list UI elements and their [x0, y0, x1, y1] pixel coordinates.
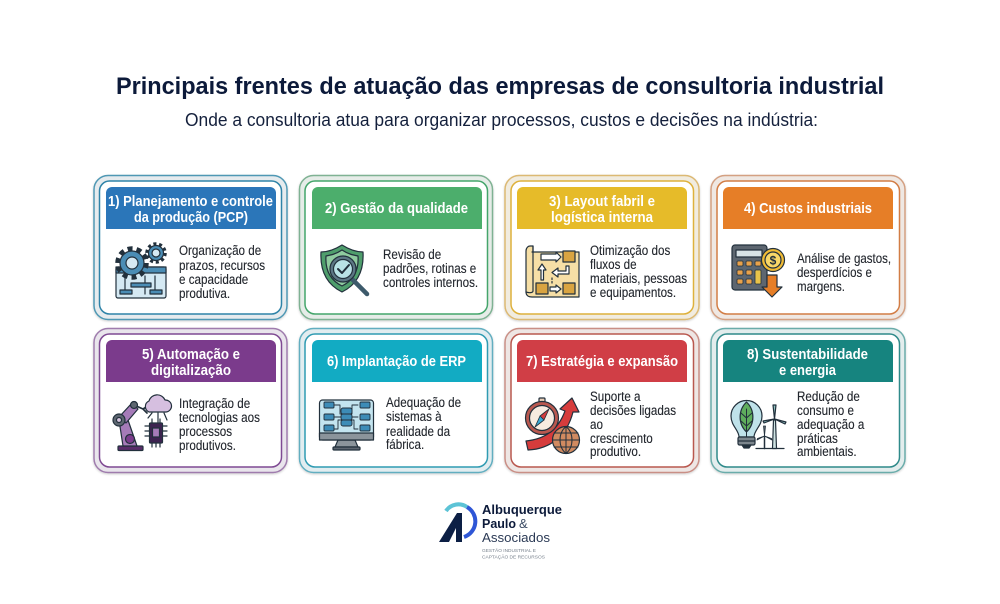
header: 1	[106, 187, 276, 229]
text: 2: padrões, rotinas e	[383, 261, 476, 276]
logo wordmark	[482, 503, 562, 560]
header: 8	[723, 340, 893, 382]
text: 5: Integração de	[179, 396, 250, 411]
text: 4: margens.	[797, 279, 845, 294]
text: 7: Suporte a	[590, 389, 641, 404]
text: 1: e capacidade	[179, 272, 248, 287]
text: 1: prazos, recursos	[179, 258, 265, 273]
text: 7: ao	[590, 417, 603, 432]
logo: Albuquerque Paulo & Associados	[439, 503, 562, 560]
panel: 3 layout fabril e logística interna	[505, 176, 699, 320]
text: 1	[179, 243, 265, 301]
text: 3: Otimização dos	[590, 243, 670, 258]
text: 6: Adequação de	[386, 395, 461, 410]
header: 6	[312, 340, 482, 382]
panel: 7 estratégia e expansão	[505, 328, 699, 472]
header: 1: da produção (PCP)	[134, 209, 248, 226]
header: 8: 8) Sustentabilidade	[747, 346, 868, 363]
header: 2: 2) Gestão da qualidade	[325, 200, 468, 217]
header: 5: digitalização	[151, 362, 231, 379]
text: 5: tecnologias aos	[179, 410, 260, 425]
header: 1: 1) Planejamento e controle	[108, 193, 273, 210]
panel: 1 planejamento e controle da produção	[94, 176, 287, 320]
panel: 2 gestão da qualidade	[300, 176, 492, 320]
header: 3	[517, 187, 687, 229]
icon: calculator, coin and down arrow: $	[770, 254, 777, 268]
text: 7	[590, 389, 676, 459]
text: 7: decisões ligadas	[590, 403, 676, 418]
icon: calculator, coin and down arrow	[732, 245, 784, 297]
panel: 5 automação e digitalização	[94, 328, 287, 472]
header: 2	[312, 187, 482, 229]
header: 5: 5) Automação e	[142, 346, 240, 363]
panel: 8 sustentabilidade e energia	[711, 328, 905, 472]
header: 7	[517, 340, 687, 382]
title: Principais frentes de atuação das empresas de consultoria industrial	[116, 73, 884, 100]
header: 3: 3) Layout fabril e	[549, 193, 655, 210]
text: 6: realidade da	[386, 424, 450, 439]
icon: light bulb with leaf and wind turbines	[731, 400, 786, 448]
icon: gears and control window	[116, 244, 166, 298]
text: 8: práticas	[797, 431, 838, 446]
text: 2: controles internos.	[383, 275, 478, 290]
header: 7: 7) Estratégia e expansão	[526, 353, 678, 370]
text: 3	[590, 243, 687, 300]
header: 4	[723, 187, 893, 229]
logo wordmark: Albuquerque	[482, 503, 562, 517]
text: 2: Revisão de	[383, 247, 441, 262]
icon: compass, growth arrow and globe	[526, 398, 580, 454]
text: 3: materiais, pessoas	[590, 271, 687, 286]
header: 6: 6) Implantação de ERP	[327, 353, 466, 370]
text: 8: Redução de	[797, 389, 860, 404]
icon: factory floor plan	[526, 246, 579, 297]
logo wordmark: Paulo	[482, 516, 516, 531]
header: 3: logística interna	[551, 209, 654, 226]
text: 6	[386, 395, 461, 452]
text: 8	[797, 389, 864, 459]
text: 8: adequação a	[797, 417, 864, 432]
text: 1: produtiva.	[179, 286, 230, 301]
logo wordmark: &	[519, 516, 528, 531]
text: 1: Organização de	[179, 243, 261, 258]
panel: 6 implantação de ERP	[300, 328, 492, 472]
header: 5	[106, 340, 276, 382]
icon: shield with magnifier	[321, 245, 367, 294]
text: 2	[383, 247, 478, 290]
text: 5: produtivos.	[179, 438, 236, 453]
logo wordmark: GESTÃO INDUSTRIAL E	[482, 547, 536, 554]
icon: logo mark	[439, 504, 475, 542]
text: 8: consumo e	[797, 403, 854, 418]
header: 8: e energia	[779, 362, 837, 379]
panel: 4 custos industriais	[711, 176, 905, 320]
text: 6: sistemas à	[386, 409, 442, 424]
text: 4: Análise de gastos,	[797, 251, 891, 266]
subtitle: Onde a consultoria atua para organizar processos, custos e decisões na indústria:	[185, 110, 818, 130]
icon: robot arm, cloud and chip	[113, 395, 172, 450]
text: 6: fábrica.	[386, 437, 424, 452]
icon: monitor with ERP modules	[320, 400, 374, 450]
text: 5: processos	[179, 424, 232, 439]
header: 4: 4) Custos industriais	[744, 200, 872, 217]
logo wordmark: Associados	[482, 530, 551, 545]
text: 4: desperdícios e	[797, 265, 872, 280]
text: 3: fluxos de	[590, 257, 637, 272]
text: 7: crescimento	[590, 431, 653, 446]
logo wordmark: CAPTAÇÃO DE RECURSOS	[482, 554, 545, 560]
text: 5	[179, 396, 260, 453]
text: 4	[797, 251, 891, 294]
text: 8: ambientais.	[797, 444, 857, 459]
text: 7: produtivo.	[590, 444, 641, 459]
text: 3: e equipamentos.	[590, 285, 676, 300]
